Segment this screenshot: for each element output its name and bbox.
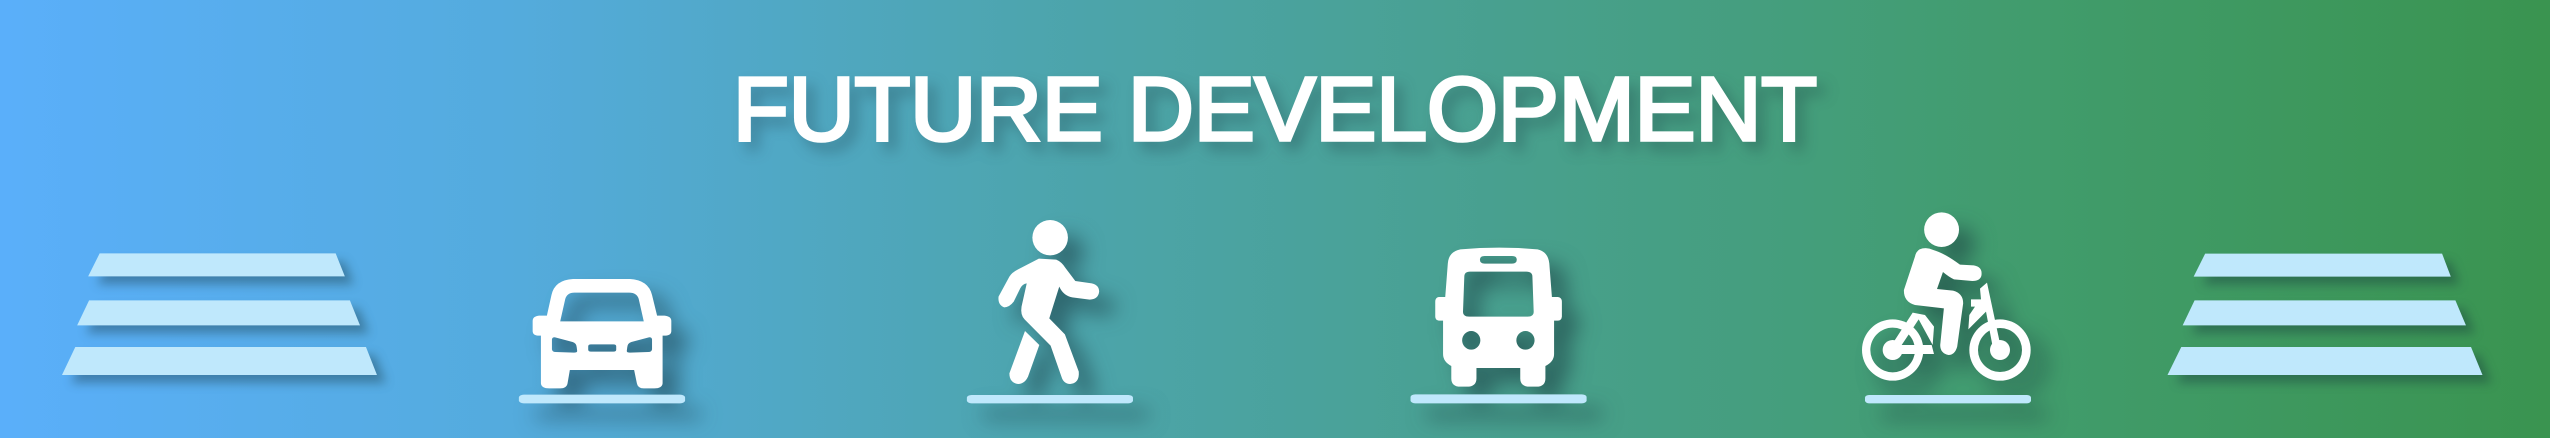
icon: cyclist bbox=[1862, 212, 2031, 403]
crosswalk stripes: left bbox=[62, 253, 377, 375]
title: FUTURE DEVELOPMENT bbox=[733, 60, 1817, 160]
icon: bus bbox=[1411, 248, 1587, 403]
crosswalk stripes: right bbox=[2167, 254, 2482, 375]
icon: pedestrian bbox=[967, 220, 1133, 403]
icon: car bbox=[519, 279, 685, 403]
